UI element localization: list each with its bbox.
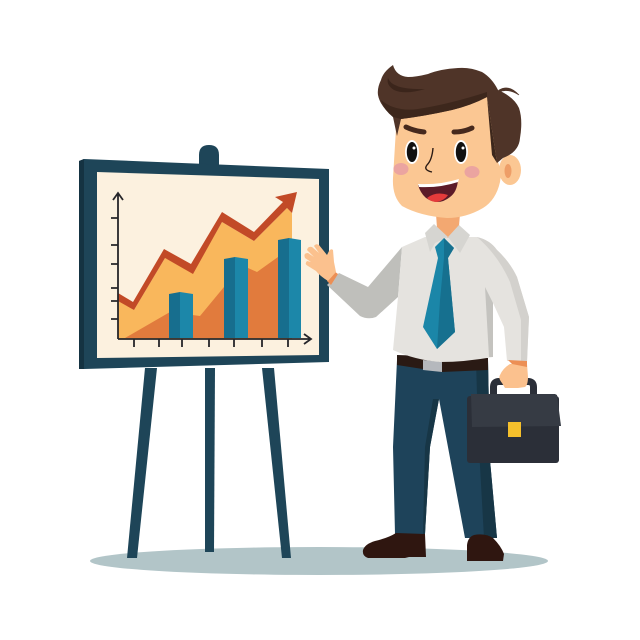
bar 1: [169, 292, 193, 338]
side hair shadow: [487, 97, 497, 163]
briefcase flap: [471, 394, 561, 427]
neck: [436, 214, 460, 238]
sleeve shading: [477, 237, 529, 362]
businessman: [304, 65, 561, 561]
cuff: [508, 360, 527, 367]
eyes: [405, 140, 468, 164]
belt: [397, 355, 488, 372]
axes: [111, 193, 311, 347]
right shoe: [467, 534, 504, 561]
trend arrow: [118, 192, 297, 310]
far arm sleeve: [327, 247, 402, 318]
hand holding briefcase: [499, 360, 528, 388]
board peg: [199, 145, 219, 165]
buckle: [423, 360, 442, 372]
shirt: [327, 237, 529, 362]
fringe underside shadow: [381, 92, 487, 119]
hair mass: [378, 65, 521, 163]
left shoe: [363, 533, 426, 558]
nose: [426, 148, 433, 172]
briefcase clasp: [508, 422, 521, 437]
ear: [499, 155, 521, 185]
eyebrows: [406, 127, 472, 132]
trousers: [393, 360, 497, 538]
easel legs: [127, 368, 291, 558]
board canvas: [97, 172, 319, 358]
orange area: [125, 257, 290, 338]
collar: [425, 224, 470, 253]
briefcase body: [467, 396, 559, 463]
board frame: [79, 159, 329, 369]
hand: [499, 364, 528, 388]
mouth: [418, 179, 459, 202]
face: [393, 92, 501, 218]
presentation board: [79, 145, 329, 369]
ground shadow: [90, 547, 548, 575]
bar 2: [224, 257, 248, 338]
hair: [378, 65, 521, 163]
briefcase handle: [494, 382, 534, 397]
yellow area: [118, 208, 292, 339]
chart: [111, 192, 311, 347]
cuff: [327, 271, 338, 285]
briefcase: [467, 382, 561, 463]
palm and fingers: [304, 244, 336, 281]
raised hand: [304, 244, 338, 285]
cheeks: [394, 163, 480, 178]
necktie: [423, 238, 455, 349]
bar 3: [278, 238, 301, 338]
torso and near arm: [393, 237, 529, 362]
curl highlight: [388, 78, 425, 92]
curl wisp: [499, 88, 519, 95]
